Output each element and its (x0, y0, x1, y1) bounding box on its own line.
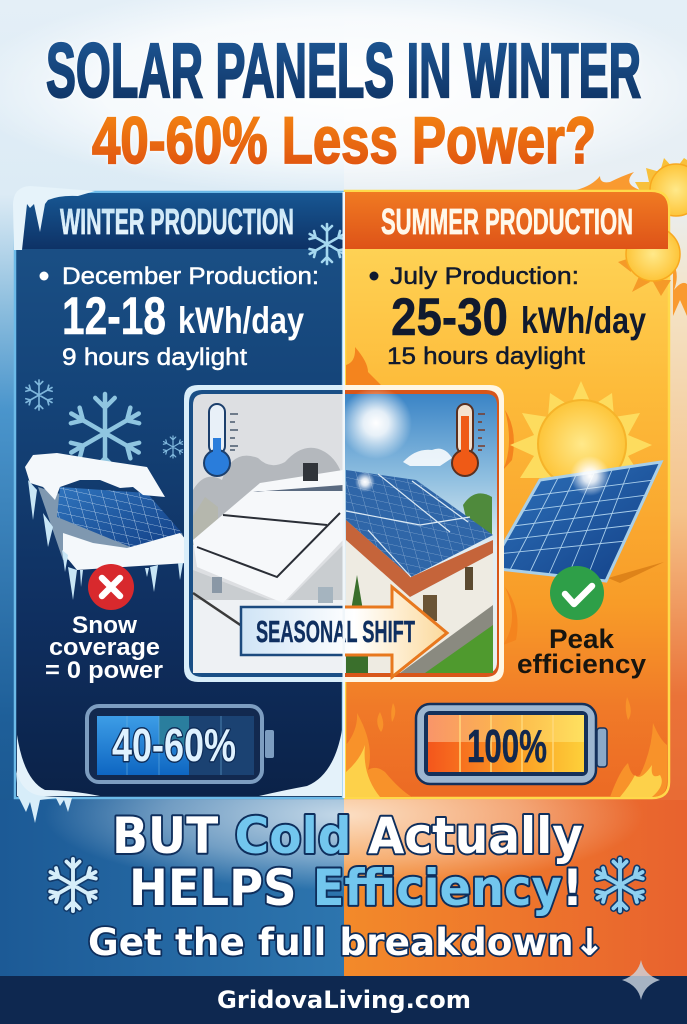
arrow: seasonal shift (241, 587, 447, 677)
july stats (370, 263, 646, 370)
peak efficiency label: Peak (549, 624, 615, 654)
icon: cold thermometer (204, 404, 238, 476)
july stats: 15 hours daylight (387, 343, 585, 370)
december stats: 12-18 (62, 287, 166, 346)
icon: sparkle (622, 960, 660, 1000)
panel header: winter: WINTER PRODUCTION (60, 201, 294, 242)
icon: flames beside photo (346, 347, 518, 645)
icon: sun (510, 381, 652, 488)
peak efficiency label (517, 624, 646, 679)
icon: red x badge (88, 564, 134, 610)
snow coverage label (45, 612, 163, 684)
photo: sunny roof (340, 387, 497, 673)
icon: header snowflake (310, 224, 344, 264)
arrow: seasonal shift: SEASONAL SHIFT (256, 614, 415, 649)
footer: GridovaLiving.com (217, 986, 471, 1014)
panel header: summer (345, 192, 668, 249)
icon: hot thermometer (452, 404, 485, 476)
december stats: 9 hours daylight (62, 344, 247, 371)
icon: green check badge (550, 566, 604, 620)
icon: bottom snow (17, 730, 342, 796)
callout: cold helps efficiency: HELPS Efficiency! (129, 859, 583, 917)
photo: snowy roof (193, 394, 343, 673)
july stats: July Production: (390, 263, 579, 290)
icon: panel sun (618, 227, 680, 296)
icon: solar panel (490, 456, 664, 583)
battery: 40-60%: 40-60% (112, 719, 236, 771)
callout: cold helps efficiency (88, 807, 605, 964)
title (46, 28, 641, 177)
icon: left side icicles behind photo (302, 678, 328, 716)
icon: corner sun and flames (576, 158, 687, 316)
december stats: kWh/day (178, 300, 304, 341)
july stats: kWh/day (521, 300, 646, 341)
snow coverage label: Snow (72, 612, 137, 639)
divider (342, 192, 345, 798)
snow coverage label: coverage (49, 634, 160, 661)
panel header: winter (16, 193, 343, 249)
icon: snow covered solar panel (25, 453, 198, 600)
july stats: 25-30 (391, 288, 508, 347)
callout: cold helps efficiency: Get the full breakdown↓ (88, 921, 605, 964)
peak efficiency label: efficiency (517, 649, 646, 679)
battery: 40-60% (87, 706, 274, 782)
december stats: December Production: (62, 263, 319, 290)
icon: left corner icicles (16, 770, 72, 823)
icon: small snowflakes (26, 380, 183, 458)
battery: 100% (416, 704, 607, 784)
icon: right bottom snowflake (597, 859, 643, 911)
icon: flames bottom (346, 697, 667, 797)
photo: winter and summer roof comparison (184, 385, 504, 682)
panel: winter production (13, 186, 344, 798)
icon: left bottom snowflake (50, 859, 96, 911)
footer (0, 976, 687, 1024)
december stats (40, 263, 319, 371)
panel: summer production (345, 191, 680, 798)
battery: 100%: 100% (467, 720, 547, 772)
callout: cold helps efficiency: BUT Cold Actually (112, 807, 583, 865)
icon: large snowflake (71, 394, 139, 472)
snow coverage label: = 0 power (45, 657, 163, 684)
icon: top snow with icicles (13, 186, 95, 250)
